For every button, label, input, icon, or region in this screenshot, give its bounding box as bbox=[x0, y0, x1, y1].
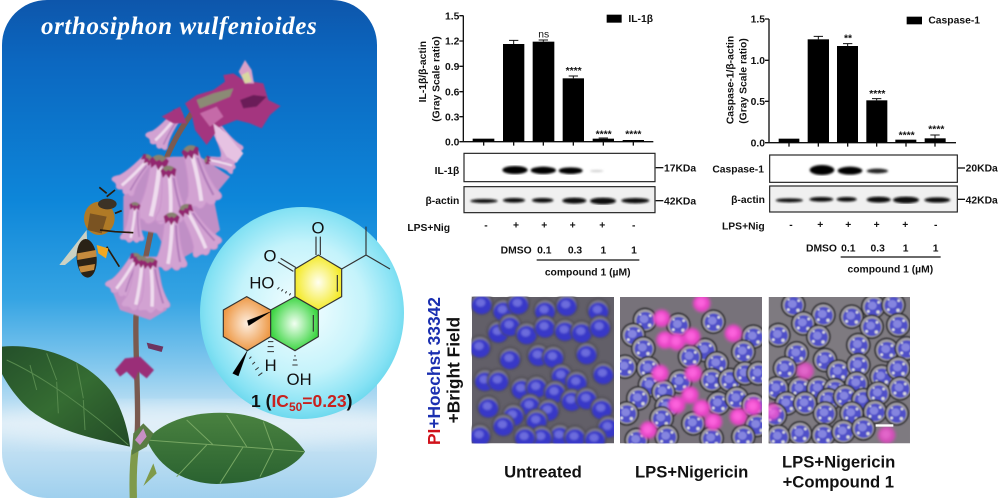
bar chart: IL-1β: IL-1β bbox=[628, 14, 653, 25]
compound label: =0.23 bbox=[302, 391, 347, 411]
bar chart: IL-1β: 1.2 bbox=[445, 37, 460, 48]
bar chart: IL-1β: 1.5 bbox=[445, 11, 460, 22]
bar chart: IL-1β: (Gray Scale ratio) bbox=[431, 36, 442, 122]
western blot: β-actin: β-actin bbox=[731, 195, 765, 206]
flowers bbox=[103, 103, 246, 320]
western blot: β-actin: 42KDa bbox=[664, 197, 696, 208]
atom labels: HO bbox=[249, 273, 274, 292]
western blot: IL-1β: IL-1β bbox=[435, 166, 459, 177]
treatment labels: - bbox=[789, 220, 793, 231]
atom labels: OH bbox=[287, 370, 312, 389]
compound label: 1 (IC bbox=[251, 391, 289, 411]
western blot: β-actin: 42KDa bbox=[966, 195, 998, 206]
bar chart: IL-1β: 0.6 bbox=[445, 87, 460, 98]
bar chart: Caspase-1: ** bbox=[844, 34, 853, 45]
treatment labels: - bbox=[484, 221, 488, 232]
panel: Caspase-1 chart and blot bbox=[712, 15, 998, 275]
treatment labels: + bbox=[570, 221, 576, 232]
treatment labels: 0.3 bbox=[568, 245, 582, 256]
bar chart: IL-1β: **** bbox=[625, 129, 642, 140]
atom labels: O bbox=[264, 246, 277, 265]
bee bbox=[59, 187, 133, 278]
treatment labels: LPS+Nig bbox=[722, 222, 765, 233]
leaf right bbox=[147, 413, 305, 484]
treatment labels: 1 bbox=[933, 243, 939, 254]
treatment labels: DMSO bbox=[806, 243, 837, 254]
caption: LPS+Nigericin+Compound 1: LPS+Nigericin bbox=[782, 453, 895, 472]
microscopy image: LPS+Nigericin+Compound 1 bbox=[768, 297, 910, 444]
plant illustration bbox=[2, 60, 305, 498]
treatment labels: - bbox=[934, 220, 938, 231]
compound label: ) bbox=[347, 391, 352, 411]
western blot: Caspase-1: 20KDa bbox=[966, 164, 998, 175]
stem bbox=[133, 113, 192, 498]
treatment labels: + bbox=[599, 221, 605, 232]
treatment labels: + bbox=[513, 221, 519, 232]
bar chart: Caspase-1 bbox=[725, 15, 980, 149]
treatment labels: DMSO bbox=[501, 245, 532, 256]
bar chart: Caspase-1: **** bbox=[899, 131, 916, 142]
bar chart: IL-1β: IL-1β/β-actin bbox=[418, 41, 429, 102]
treatment labels: compound 1 (µM) bbox=[545, 267, 631, 278]
bar chart: Caspase-1: **** bbox=[869, 89, 886, 100]
treatment labels: LPS+Nig bbox=[407, 223, 450, 234]
microscopy image: LPS+Nigericin bbox=[620, 297, 762, 444]
treatment labels: + bbox=[541, 221, 547, 232]
caption: Untreated: Untreated bbox=[504, 462, 582, 481]
bar chart: IL-1β: 0.3 bbox=[445, 112, 460, 123]
western blot: β-actin bbox=[731, 186, 998, 212]
rotated stain label: PI+Hoechst 33342 bbox=[424, 297, 444, 445]
bar chart: Caspase-1: 0.5 bbox=[751, 97, 765, 108]
atom labels: H bbox=[265, 356, 277, 375]
treatment labels: 0.1 bbox=[537, 245, 552, 256]
bar chart: IL-1β bbox=[418, 11, 653, 148]
treatment labels: 0.3 bbox=[870, 243, 885, 254]
bar chart: IL-1β: **** bbox=[566, 66, 583, 77]
panel: microscopy bbox=[424, 292, 919, 492]
treatment labels: 0.1 bbox=[841, 243, 856, 254]
flower top mass bbox=[162, 60, 281, 163]
atom labels bbox=[249, 218, 325, 389]
western blot: β-actin bbox=[425, 187, 696, 213]
bar chart: IL-1β: ns bbox=[538, 29, 549, 40]
microscopy image: untreated bbox=[472, 296, 614, 444]
bar chart: Caspase-1: Caspase-1/β-actin bbox=[725, 36, 736, 124]
caption: LPS+Nigericin: LPS+Nigericin bbox=[635, 462, 748, 481]
compound circle bbox=[200, 207, 404, 419]
panel: IL-1β chart and blot bbox=[407, 11, 696, 278]
treatment labels: 1 bbox=[631, 245, 637, 256]
bar chart: IL-1β: **** bbox=[596, 129, 613, 140]
atom labels: O bbox=[312, 218, 325, 237]
bar chart: Caspase-1: 1.5 bbox=[751, 15, 765, 26]
western blot: β-actin: β-actin bbox=[425, 196, 459, 207]
treatment labels: + bbox=[817, 220, 823, 231]
western blot: Caspase-1 bbox=[712, 155, 998, 182]
treatment labels: 1 bbox=[903, 243, 909, 254]
treatment labels: + bbox=[845, 220, 851, 231]
title: orthosiphon wulfenioides bbox=[41, 13, 317, 40]
treatment labels: + bbox=[874, 220, 880, 231]
western blot: IL-1β: 17KDa bbox=[664, 163, 696, 174]
compound label: 50 bbox=[289, 400, 303, 414]
treatment labels: - bbox=[632, 221, 636, 232]
western blot: Caspase-1: Caspase-1 bbox=[712, 165, 764, 176]
caption: LPS+Nigericin+Compound 1 bbox=[782, 453, 895, 492]
treatment labels bbox=[722, 220, 941, 275]
chemical structure bbox=[223, 218, 390, 389]
bar chart: Caspase-1: 0.0 bbox=[751, 138, 765, 149]
rotated stain label: +Bright Field bbox=[444, 317, 464, 423]
bar chart: Caspase-1: (Gray Scale ratio) bbox=[739, 38, 750, 124]
caption: LPS+Nigericin+Compound 1: +Compound 1 bbox=[783, 473, 894, 492]
bar chart: IL-1β: 0.0 bbox=[445, 137, 460, 148]
treatment labels: compound 1 (µM) bbox=[847, 264, 933, 275]
western blot: IL-1β bbox=[435, 153, 696, 182]
treatment labels: + bbox=[902, 220, 908, 231]
panel: plant photo bbox=[0, 0, 410, 498]
bar chart: Caspase-1: Caspase-1 bbox=[928, 16, 980, 27]
bar chart: IL-1β: 0.9 bbox=[445, 62, 460, 73]
treatment labels: 1 bbox=[600, 245, 606, 256]
scale bar bbox=[876, 424, 893, 427]
treatment labels bbox=[407, 221, 639, 278]
leaf left bbox=[2, 346, 130, 447]
bar chart: Caspase-1: 1.0 bbox=[751, 56, 765, 67]
rotated stain label bbox=[424, 297, 464, 445]
lower buds bbox=[115, 357, 154, 380]
bar chart: Caspase-1: **** bbox=[928, 125, 945, 136]
